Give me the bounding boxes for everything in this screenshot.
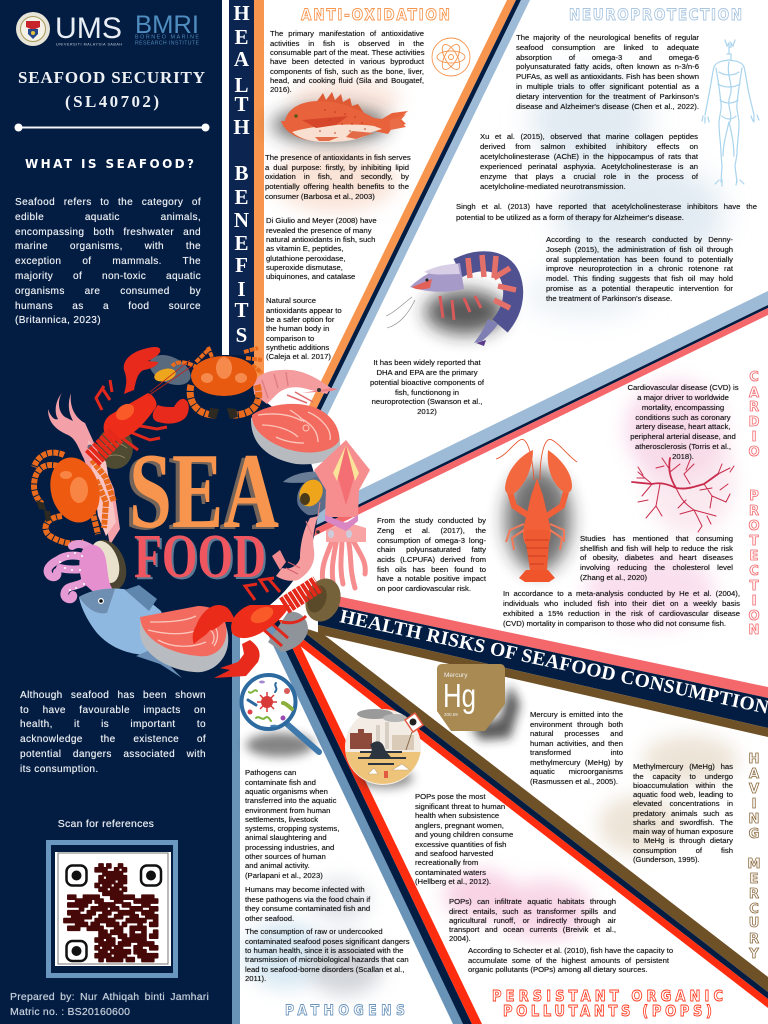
text: POPs pathways: direct entails, such as transformer spills and	[449, 907, 616, 916]
vertical heading: health benefits: T	[234, 298, 249, 322]
text: dangers note: potential dangers associated with	[20, 749, 206, 760]
icon: red sea bream fish	[261, 92, 408, 156]
text: cardiovascular disease: a major driver to worldwide	[637, 393, 729, 402]
text: pathogens contamination: processing industries, and	[245, 843, 334, 852]
text: antioxidative activities: activities in fish is observed in the	[270, 39, 424, 48]
text: marine collagen peptides: enzyme that plays a crucial role in the process of	[480, 172, 698, 181]
text: dangers note: its consumption.	[20, 764, 99, 775]
band: health risks title ribbon	[318, 592, 768, 737]
text: cardiovascular disease: conditions such as coronary	[635, 413, 731, 422]
text: pathogens contamination	[245, 768, 345, 880]
salmon steak top	[251, 404, 340, 464]
text: natural antioxidants list: glutathione peroxidase,	[266, 254, 346, 263]
text: natural source antioxidants: Natural source	[266, 296, 316, 305]
text: methylmercury bioaccumulation	[632, 762, 734, 864]
vertical heading: health benefits: L	[234, 73, 249, 97]
text: marine collagen peptides	[480, 132, 698, 191]
label: scan for references: Scan for references	[58, 818, 154, 830]
vertical heading: having mercury: R	[749, 887, 759, 902]
text: methylmercury bioaccumulation: main way of human exposure	[633, 827, 733, 836]
heading: neuroprotection: NEUROPROTECTION	[569, 5, 742, 24]
text: omega-3 and cardiovascular risk: consumption of omega-3 long-	[377, 536, 486, 545]
vertical heading: cardio protection: D	[749, 415, 760, 430]
text: neurological benefits: seafood consumption are linked to adequate	[516, 43, 699, 52]
icon: magnifier with microbes	[240, 672, 330, 762]
text: POPs threat: POPs pose the most	[415, 792, 486, 801]
text: fish oil and Parkinson's: model. This finding suggests that fish oil may hold	[546, 274, 733, 283]
text: omega-3 and cardiovascular risk: on poor cardiovascular risk.	[377, 584, 471, 593]
vertical heading: having mercury: R	[749, 932, 759, 947]
text: seafood definition: majority of non-toxic aquatic	[15, 271, 201, 282]
text: fish oil and Parkinson's: oral supplementation has been found to potentially	[546, 255, 733, 264]
text: marine collagen peptides: Xu et al. (2015), observed that marine collagen peptides	[480, 132, 698, 141]
logos: UMS	[55, 12, 122, 45]
logos: UNIVERSITI MALAYSIA SABAH	[56, 42, 122, 46]
text: neurological benefits: dietary intervention for the treatment of Parkinson's	[516, 92, 699, 101]
text: infection via food chain: these pathogens via the food chain if	[245, 895, 370, 904]
top crab	[172, 347, 262, 419]
vertical heading: cardio protection: P	[749, 489, 759, 504]
heading: persistant organic pollutants: PERSISTANT ORGANIC	[492, 988, 723, 1005]
text: cardiovascular disease: 2018).	[672, 452, 694, 461]
oyster cream	[83, 535, 133, 595]
text: dual purpose of antioxidants: consumer (Barbosa et al., 2003)	[265, 192, 375, 201]
text: pathogens contamination: systems, cropping systems,	[245, 824, 339, 833]
brown oyster	[300, 574, 346, 626]
text: antioxidative activities: consumable part of the meat. These activities	[270, 48, 425, 57]
text: raw seafood dangers: The consumption of raw or undercooked	[245, 927, 383, 936]
bottom right lobster	[193, 578, 318, 678]
vertical heading: cardio protection: O	[748, 445, 760, 460]
text: omega-3 and cardiovascular risk: acids (LCPUFA) derived from	[377, 555, 486, 564]
icon: atom	[432, 38, 470, 76]
text: meta-analysis: exhibited a 15% reduction in the risk of cardiovascular disease	[503, 609, 740, 618]
text: fish accumulate POPs	[468, 946, 669, 975]
text: DHA and EPA	[370, 358, 484, 416]
text: marine collagen peptides: derived from salmon exhibited inhibitory effects on	[480, 142, 698, 151]
text: meta-analysis	[503, 589, 740, 628]
text: mercury emission	[530, 710, 624, 786]
top shrimp	[253, 370, 338, 404]
icon: mercury element card	[437, 664, 527, 748]
text: seafood definition: encompassing both freshwater and	[15, 227, 201, 238]
text: POPs threat: contaminated waters	[415, 868, 486, 877]
heading: health risks of seafood consumption: HEALTH RISKS OF SEAFOOD CONSUMPTION	[338, 606, 768, 719]
navy circle behind ring	[62, 377, 318, 633]
text: natural source antioxidants: the human body in	[266, 324, 329, 333]
vertical heading: cardio protection: A	[749, 386, 759, 401]
text: AChE inhibitors: potential to be utilized as a form of therapy for Alzheimer's disease.	[456, 213, 684, 222]
heading: what is seafood: WHAT IS SEAFOOD?	[25, 157, 194, 171]
text: POPs threat: and seafood harvested	[415, 849, 493, 858]
text: shellfish and cholesterol: of obesity, diabetes and heart diseases	[580, 553, 733, 562]
text: natural source antioxidants: antioxidants appear to	[266, 306, 342, 315]
text: pathogens contamination: settlements, livestock	[245, 815, 318, 824]
vertical heading: cardio protection: R	[749, 400, 759, 415]
vertical heading: cardio protection: O	[748, 609, 760, 624]
watercolor washes	[243, 70, 738, 995]
text: omega-3 and cardiovascular risk: From the study conducted by	[377, 516, 486, 525]
text: POPs threat: excessive quantities of fish	[415, 840, 506, 849]
left squid	[48, 393, 120, 545]
text: antioxidative activities	[270, 29, 425, 94]
logos: RESEARCH INSTITUTE	[135, 40, 200, 46]
text: fish accumulate POPs: accumulate some of the highest amounts of persistent	[468, 956, 669, 965]
text: mercury emission: human activities, and then	[530, 739, 623, 748]
vertical heading: cardio protection: N	[749, 623, 759, 638]
vertical heading: cardio protection: R	[749, 504, 759, 519]
left strip	[232, 620, 240, 1024]
text: cardiovascular disease: atherosclerosis (Torris et al.,	[635, 442, 731, 451]
text: meta-analysis: (CVD) mortality in comparison to those who did not consume fish.	[503, 619, 726, 628]
vertical heading: having mercury	[744, 750, 768, 960]
title: FOOD: FOOD	[134, 523, 266, 591]
text: methylmercury bioaccumulation: the capacity to undergo	[633, 772, 733, 781]
top left lobster	[92, 347, 192, 459]
vertical heading: cardio protection: O	[748, 519, 760, 534]
icon: blood vessels	[631, 457, 734, 532]
vertical heading: health benefits: N	[234, 208, 249, 232]
icon: polluted harbor circle	[340, 705, 430, 795]
title: FOOD: FOOD	[136, 525, 268, 593]
right shrimp	[272, 502, 320, 581]
text: pathogens contamination: aquatic organisms when	[245, 787, 328, 796]
title: SEA: SEA	[125, 434, 275, 553]
text: POPs pathways: transport and ocean currents (Breivik et al.,	[449, 925, 616, 934]
text: infection via food chain	[245, 885, 375, 924]
text: natural source antioxidants: synthetic additions	[266, 343, 329, 352]
dark oyster left	[97, 427, 133, 469]
text: infection via food chain: other seafood.	[245, 914, 294, 923]
text: dangers note: to have favourable impacts on	[20, 705, 206, 716]
icon: mercury element card: 200.59	[444, 712, 458, 717]
text: pathogens contamination: other sources of human	[245, 852, 326, 861]
text: DHA and EPA: DHA and EPA are the primary	[376, 368, 478, 377]
text: cardiovascular disease: peripheral arterial disease, and	[630, 432, 736, 441]
text: mercury emission: natural processes and	[530, 729, 623, 738]
vertical heading: cardio protection: E	[750, 549, 758, 564]
text: natural antioxidants list: superoxide dismutase,	[266, 263, 343, 272]
text: natural antioxidants list: natural antioxidants in fish, such	[266, 235, 375, 244]
vertical heading: cardio protection: T	[750, 579, 759, 594]
text: dual purpose of antioxidants: potentially offering health benefits to the	[265, 182, 409, 191]
text: natural source antioxidants: (Caleja et al. 2017)	[266, 352, 331, 361]
text: fish oil and Parkinson's: Joseph (2015), the administration of fish oil through	[546, 245, 733, 254]
vertical heading: having mercury: U	[749, 916, 759, 931]
text: marine collagen peptides: experienced perinatal asphyxia. Acetylcholinesterase is an	[480, 162, 698, 171]
panel: neuroprotection	[456, 5, 760, 303]
text: seafood definition: humans as a food source	[15, 301, 201, 312]
text: DHA and EPA: 2012)	[417, 407, 437, 416]
icon: crayfish	[492, 438, 584, 584]
text: antioxidative activities: The primary manifestation of antioxidative	[270, 29, 424, 38]
text: pathogens contamination: transferred into the aquatic	[245, 796, 336, 805]
vertical heading: cardio protection: C	[749, 370, 759, 385]
icon: purple prawn	[386, 251, 524, 348]
text: dual purpose of antioxidants: a dual purpose: firstly, by inhibiting lipid	[265, 163, 409, 172]
text: POPs threat: and young children consume	[415, 830, 513, 839]
text: seafood definition: edible aquatic animals,	[15, 212, 201, 223]
mussel top	[145, 349, 195, 391]
text: neurological benefits: polyunsaturated fatty acids, often known as n-3/n-6	[516, 62, 699, 71]
text: fish oil and Parkinson's: promise as a potential therapeutic intervention for	[546, 284, 733, 293]
text: dual purpose of antioxidants: The presence of antioxidants in fish serves	[265, 153, 411, 162]
text: AChE inhibitors: Singh et al. (2013) have reported that acetylcholinesterase inhibitors have the	[456, 202, 757, 211]
text: shellfish and cholesterol	[580, 534, 734, 582]
text: natural source antioxidants	[266, 296, 342, 361]
text: mercury emission: (Rasmussen et al., 2005).	[530, 777, 618, 786]
text: marine collagen peptides: acetylcholine-mediated neurotransmission.	[480, 182, 626, 191]
text: omega-3 and cardiovascular risk: fish oils has been found to	[377, 565, 486, 574]
text: seafood definition: organisms are consumed by	[15, 286, 201, 297]
text: fish oil and Parkinson's: the treatment of Parkinson's disease.	[546, 294, 672, 303]
text: natural antioxidants list: ubiquinones, and catalase	[266, 272, 355, 281]
text: author credit: Matric no. : BS20160600	[10, 1006, 130, 1018]
text: POPs threat: anglers, pregnant women,	[415, 821, 504, 830]
text: infection via food chain: they consume contaminated fish and	[245, 904, 370, 913]
icon: mercury element card: Hg	[443, 677, 476, 714]
title: seafood security: (SL40702)	[65, 92, 159, 111]
text: meta-analysis: individuals who included fish into their diet on a weekly basis	[503, 599, 740, 608]
panel: having mercury	[437, 664, 760, 962]
text: methylmercury bioaccumulation: aquatic food web, leading to	[633, 790, 733, 799]
text: infection via food chain: Humans may become infected with	[245, 885, 365, 894]
text: AChE inhibitors	[456, 202, 757, 222]
text: shellfish and cholesterol: Studies has mentioned that consuming	[580, 534, 733, 543]
text: dangers note: health, it is important to	[20, 719, 206, 730]
text: neurological benefits: The majority of the neurological benefits of regular	[516, 33, 699, 42]
vertical heading: health benefits: E	[234, 231, 249, 255]
text: POPs threat: recreationally from	[415, 858, 478, 867]
text: methylmercury bioaccumulation: sharks and swordfish. The	[633, 818, 733, 827]
text: dual purpose of antioxidants: oxidation in fish, and secondly, by	[265, 172, 409, 181]
vertical heading: having mercury: G	[749, 827, 759, 842]
text: fish accumulate POPs: organic pollutants (POPs) among all dietary sources.	[468, 965, 647, 974]
text: fish accumulate POPs: According to Schecter et al. (2010), fish have the capacity to	[468, 946, 673, 955]
text: shellfish and cholesterol: involving reducing the cholesterol level	[580, 563, 733, 572]
text: raw seafood dangers: 2011).	[245, 974, 266, 983]
text: seafood definition: marine organisms, with the	[15, 241, 201, 252]
icon: mercury element card: Mercury	[444, 672, 468, 679]
heading: persistant organic pollutants	[488, 986, 728, 1020]
text: antioxidative activities: have been detected in various byproduct	[270, 57, 424, 66]
text: POPs threat: significant threat to human	[415, 802, 505, 811]
gray steak skin under lobster	[268, 612, 308, 652]
text: POPs pathways: POPs) can infiltrate aquatic habitats through	[449, 897, 616, 906]
text: antioxidative activities: 2016).	[270, 85, 292, 94]
text: raw seafood dangers: contaminated seafood poses significant dangers	[245, 937, 410, 946]
text: methylmercury bioaccumulation: bioaccumulation within the	[633, 781, 733, 790]
panel: pathogens	[240, 672, 450, 1020]
logos: BMRI	[135, 11, 199, 39]
text: pathogens contamination: animal slaughtering and	[245, 833, 327, 842]
text: neurological benefits: disease and Alzheimer's disease (Chen et al., 2022).	[516, 102, 699, 111]
text: cardiovascular disease: Cardiovascular disease (CVD) is	[627, 383, 739, 392]
text: neurological benefits: in multiple trials to offer significant potential as a	[516, 82, 699, 91]
vertical heading: health benefits: E	[234, 25, 249, 49]
text: omega-3 and cardiovascular risk: chain polyunsaturated fatty	[377, 545, 486, 554]
title: SEA: SEA	[129, 432, 279, 551]
seafood ring with title	[28, 340, 378, 685]
heading: persistant organic pollutants: POLLUTANTS (POPS)	[503, 1003, 712, 1020]
text: pathogens contamination: (Parlapani et al., 2023)	[245, 871, 323, 880]
vertical heading: health benefits: E	[234, 185, 249, 209]
text: POPs threat: (Hellberg et al., 2012).	[415, 877, 491, 886]
vertical heading: having mercury: N	[749, 812, 759, 827]
text: seafood definition	[15, 197, 201, 326]
text: raw seafood dangers	[245, 927, 410, 983]
vertical heading: having mercury: C	[749, 902, 759, 917]
text: omega-3 and cardiovascular risk	[376, 516, 486, 593]
text: DHA and EPA: fish, functionong in	[395, 388, 459, 397]
octopus	[48, 544, 112, 599]
text: DHA and EPA: potential bioactive components of	[370, 378, 484, 387]
text: meta-analysis: In accordance to a meta-analysis conducted by He et al. (2004),	[503, 589, 740, 598]
text: POPs threat	[415, 792, 525, 887]
vertical heading: having mercury: H	[749, 752, 759, 767]
text: natural antioxidants list	[266, 216, 377, 281]
text: pathogens contamination: and animal activity.	[245, 861, 310, 870]
text: pathogens contamination: environment from human	[245, 806, 330, 815]
text: POPs pathways: agricultural runoff, or indirectly through air	[449, 916, 616, 925]
logos: BORNEO MARINE	[135, 34, 199, 40]
text: dangers note	[20, 690, 206, 775]
text: shellfish and cholesterol: (Zhang et al., 2020)	[580, 573, 647, 582]
vertical heading: health benefits: H	[233, 115, 250, 139]
text: mercury emission: transformed into	[530, 748, 623, 757]
band: blue navy red downward diagonal	[261, 620, 482, 1024]
text: methylmercury bioaccumulation: elevated concentrations in	[633, 799, 733, 808]
text: DHA and EPA: It has been widely reported that	[373, 358, 481, 367]
text: natural antioxidants list: Di Giulio and Meyer (2008) have	[266, 216, 377, 225]
panel: cardio protection	[376, 370, 760, 638]
text: mercury emission: Mercury is emitted into the	[530, 710, 623, 719]
vertical heading: health benefits: I	[237, 277, 246, 301]
vertical heading: health benefits: F	[235, 253, 248, 277]
vertical heading: health benefits: T	[234, 92, 249, 116]
band: brown navy red lower diagonal	[295, 625, 768, 1008]
text: raw seafood dangers: to human health, since it is associated with the	[245, 946, 404, 955]
salmon steak bottom	[140, 606, 228, 672]
text: marine collagen peptides: acetylcholinesterase (AChE) in the hippocampus of rats that	[480, 152, 698, 161]
text: cardiovascular disease	[627, 383, 739, 461]
mussel right	[283, 472, 333, 515]
text: methylmercury bioaccumulation: Methylmercury (MeHg) has	[633, 762, 733, 771]
text: neurological benefits	[516, 33, 700, 111]
vertical heading: having mercury: V	[749, 782, 759, 797]
text: author credit: Prepared by: Nur Athiqah binti Jamhari	[10, 991, 209, 1003]
panel: sidebar	[10, 11, 210, 1018]
text: fish oil and Parkinson's: improve neuroprotection in a chronic rotenone rat	[546, 264, 733, 273]
text: methylmercury bioaccumulation: predatory animals such as	[633, 809, 733, 818]
band: orange navy blue upper diagonal	[302, 0, 530, 420]
heading: pathogens: PATHOGENS	[285, 1002, 405, 1019]
text: mercury emission: environment through both	[530, 720, 623, 729]
text: natural source antioxidants: be a safer option for	[266, 315, 334, 324]
text: antioxidative activities: components of fish, such as the bone, liver,	[270, 67, 424, 76]
text: POPs threat: health when subsistence	[415, 811, 499, 820]
text: fish oil and Parkinson's: According to the research conducted by Denny-	[546, 235, 733, 244]
text: natural antioxidants list: revealed the presence of many	[266, 226, 372, 235]
right squid	[314, 440, 370, 588]
vertical heading: cardio protection: I	[752, 594, 756, 609]
vertical heading: cardio protection: C	[749, 564, 759, 579]
blue fish	[79, 585, 182, 678]
QR code	[46, 840, 178, 978]
text: methylmercury bioaccumulation: (Gunderson, 1995).	[633, 855, 700, 864]
left crab	[34, 452, 114, 544]
band: blue navy coral middle diagonal	[300, 291, 768, 543]
vertical heading: health benefits	[233, 1, 250, 347]
text: author credit	[10, 991, 209, 1018]
text: mercury emission: methylmercury (MeHg) by	[530, 758, 623, 767]
divider with dots	[14, 124, 210, 132]
vertical heading: health benefits: S	[236, 323, 247, 347]
text: pathogens contamination: Pathogens can	[245, 768, 296, 777]
vertical heading: having mercury: I	[752, 797, 756, 812]
text: neurological benefits: absorption of omega-3 and omega-6	[516, 53, 699, 62]
text: omega-3 and cardiovascular risk: have a notable positive impact	[377, 574, 486, 583]
icon: human nervous system figure	[701, 39, 760, 187]
vertical heading: cardio protection: T	[750, 534, 759, 549]
text: dual purpose of antioxidants	[264, 153, 411, 201]
vertical heading: health benefits: B	[234, 161, 249, 185]
text: DHA and EPA: neuroprotection (Swanson et al.,	[372, 397, 482, 406]
text: methylmercury bioaccumulation: to MeHg is through dietary	[633, 836, 733, 845]
vertical heading: having mercury: A	[749, 767, 759, 782]
text: fish oil and Parkinson's	[546, 235, 734, 303]
panel: anti-oxidation	[261, 5, 470, 361]
vertical heading: having mercury: Y	[748, 947, 759, 962]
text: methylmercury bioaccumulation: consumption of fish	[633, 846, 733, 855]
text: shellfish and cholesterol: shellfish and fish will help to reduce the risk	[580, 544, 733, 553]
vertical heading: having mercury: M	[748, 857, 760, 872]
text: POPs pathways: 2004).	[449, 934, 471, 943]
vertical heading: health benefits: A	[234, 47, 250, 71]
text: cardiovascular disease: artery disease, heart attack,	[636, 422, 730, 431]
title: seafood security: SEAFOOD SECURITY	[18, 68, 205, 87]
text: cardiovascular disease: mortality, encompassing	[642, 403, 724, 412]
title: seafood security	[18, 68, 205, 111]
text: raw seafood dangers: transmission of microbiological hazards that can	[245, 955, 409, 964]
text: natural source antioxidants: comparison to	[266, 334, 314, 343]
text: pathogens contamination: contaminate fish and	[245, 778, 316, 787]
text: raw seafood dangers: lead to seafood-borne disorders (Scallan et al.,	[245, 965, 404, 974]
text: dangers note: Although seafood has been shown	[20, 690, 206, 701]
vertical heading: health benefits: H	[233, 1, 250, 25]
vertical heading: cardio protection	[748, 370, 760, 638]
text: mercury emission: aquatic microorganisms	[530, 767, 623, 776]
logos	[16, 11, 200, 46]
text: omega-3 and cardiovascular risk: Zeng et al. (2017), the	[377, 526, 486, 535]
text: antioxidative activities: head, and cooking fluid (Sila and Bougatef,	[270, 76, 424, 85]
panel: persistent organic pollutants	[340, 700, 725, 1020]
text: neurological benefits: PUFAs, as well as antioxidants. Fish has been shown	[516, 72, 699, 81]
heading: anti-oxidation: ANTI-OXIDATION	[301, 5, 450, 24]
text: seafood definition: Seafood refers to the category of	[15, 197, 201, 208]
vertical heading: having mercury: E	[750, 872, 758, 887]
text: dangers note: acknowledge the existence of	[20, 734, 206, 745]
text: seafood definition: exception of mammals. The	[15, 256, 201, 267]
text: seafood definition: (Britannica, 2023)	[15, 315, 101, 326]
text: natural antioxidants list: as vitamin E, peptides,	[266, 244, 343, 253]
text: POPs pathways	[449, 897, 616, 944]
vertical heading: cardio protection: I	[752, 430, 756, 445]
